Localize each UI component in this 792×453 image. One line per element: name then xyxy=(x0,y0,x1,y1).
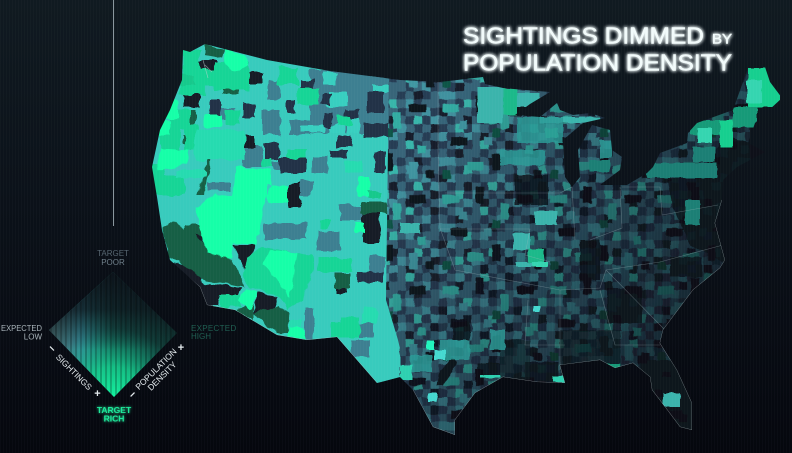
state borders xyxy=(438,82,723,370)
axis plus: population: + xyxy=(178,342,184,354)
axis label: population: POPULATION xyxy=(133,346,179,392)
title: BY xyxy=(712,30,733,46)
teal-green counties xyxy=(175,130,377,326)
title: POPULATION DENSITY xyxy=(463,50,732,76)
label: expected high second line: HIGH xyxy=(191,332,211,341)
mosaic: western counties xyxy=(152,44,400,383)
axis plus: sightings: + xyxy=(94,388,101,400)
label: expected high: EXPECTED xyxy=(191,324,237,333)
title xyxy=(463,22,733,76)
medium green counties xyxy=(150,50,360,337)
teal counties xyxy=(300,72,390,133)
label: expected low: EXPECTED xyxy=(1,324,42,333)
map of the United States xyxy=(140,30,780,450)
label: expected low second line: LOW xyxy=(24,332,42,342)
bright green counties xyxy=(155,50,370,340)
label: target poor second line: POOR xyxy=(101,258,125,267)
label: target rich: TARGET xyxy=(97,405,132,415)
bivariate legend xyxy=(1,249,237,424)
axis label: sightings: SIGHTINGS xyxy=(54,352,94,392)
dark slate counties xyxy=(210,80,400,283)
dark green counties xyxy=(162,44,387,333)
axis minus: population: − xyxy=(126,388,140,402)
slate counties xyxy=(207,70,400,357)
label: target rich xyxy=(97,405,132,424)
black counties xyxy=(170,60,380,315)
legend diamond xyxy=(49,272,177,397)
title: SIGHTINGS DIMMED xyxy=(463,22,704,48)
axis minus: sightings: − xyxy=(45,342,58,356)
vertical legend leader line xyxy=(113,0,114,226)
coastline xyxy=(170,60,725,435)
label: target poor: TARGET xyxy=(97,249,129,258)
label: target rich: RICH xyxy=(104,414,124,424)
mosaic: eastern counties xyxy=(370,60,780,450)
axis label: density: DENSITY xyxy=(145,359,179,393)
